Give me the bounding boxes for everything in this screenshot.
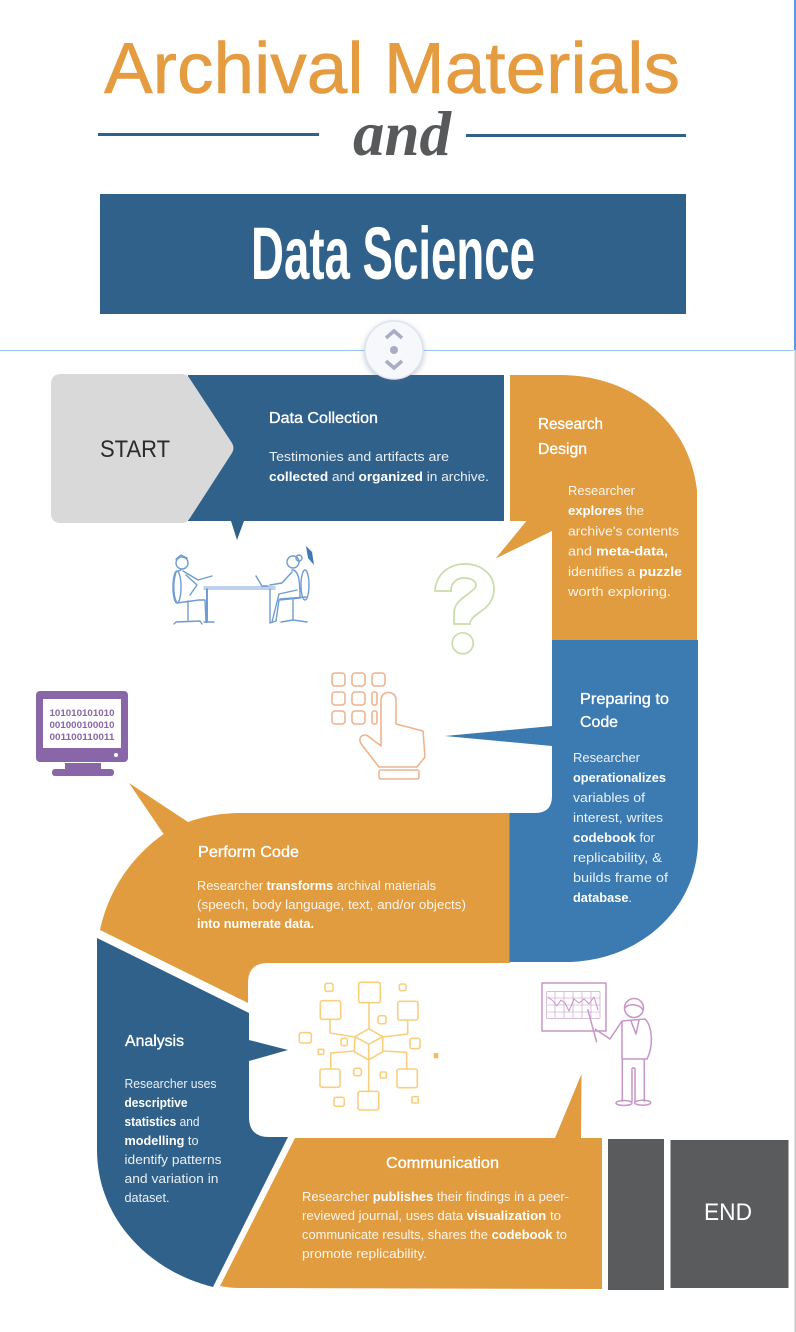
text: analysis body: Researcher uses (124, 1077, 216, 1091)
icon: computer monitor with binary: 001000100010 (50, 720, 114, 731)
text: research design body: explores the (568, 504, 644, 518)
text: preparing to code body: operationalizes (573, 771, 666, 785)
title banner: Data Science (100, 194, 686, 314)
text: perform code body: Researcher transforms archival materials (197, 879, 436, 893)
icon: presenter with chart (542, 983, 651, 1106)
panel: preparing to code (445, 640, 698, 962)
text: analysis body: dataset. (124, 1191, 170, 1205)
text: communication body: reviewed journal, uses data visualization to (302, 1209, 561, 1223)
text: data collection body (269, 450, 489, 484)
heading: preparing to code: Code (580, 714, 618, 731)
icon: question mark (435, 564, 494, 654)
text: preparing to code body: replicability, & (573, 851, 663, 865)
text: preparing to code body: Researcher (573, 751, 640, 765)
text: preparing to code body: database. (573, 891, 632, 905)
text: communication body: promote replicability. (302, 1247, 427, 1261)
text: perform code body (197, 879, 466, 931)
text: preparing to code body: builds frame of (573, 871, 669, 885)
end marker: END (704, 1199, 752, 1226)
panel: perform code (100, 783, 510, 1003)
text: research design body: and meta-data, (568, 544, 668, 558)
text: communication body (302, 1190, 569, 1261)
text: analysis body: and variation in (124, 1172, 219, 1186)
text: analysis body: modelling to (124, 1134, 199, 1148)
text: preparing to code body: codebook for (573, 831, 655, 845)
panel: data collection (188, 375, 504, 540)
icon: computer monitor with binary: 101010101010 (50, 708, 114, 719)
text: research design body: archive's contents (568, 524, 679, 538)
heading: analysis: Analysis (125, 1033, 184, 1050)
text: data collection body: Testimonies and artifacts are (269, 450, 449, 464)
end marker (608, 1139, 788, 1290)
icon: two people at a table (173, 546, 314, 624)
title: Archival Materials: Archival Materials (104, 29, 680, 109)
heading: communication: Communication (386, 1155, 499, 1172)
heading: preparing to code (580, 691, 669, 731)
text: communication body: Researcher publishes their findings in a peer- (302, 1190, 569, 1204)
start marker: START (100, 436, 170, 463)
text: research design body: identifies a puzzle (568, 565, 682, 579)
text: preparing to code body: variables of (573, 791, 646, 805)
text: research design body: worth exploring. (567, 585, 671, 599)
heading: perform code: Perform Code (198, 844, 299, 861)
text: perform code body: (speech, body language, text, and/or objects) (197, 898, 466, 912)
text: data collection body: collected and organized in archive. (269, 470, 489, 484)
text: analysis body: statistics and (124, 1115, 200, 1129)
icon: data network cube (299, 982, 438, 1110)
text: analysis body: descriptive (124, 1096, 188, 1110)
text: analysis body (124, 1077, 222, 1205)
text: research design body (567, 484, 682, 599)
scroll handle (365, 321, 423, 379)
text: analysis body: identify patterns (124, 1153, 222, 1167)
panel: communication (220, 1074, 602, 1289)
subtitle rule and script word: and (98, 98, 686, 169)
text: preparing to code body: interest, writes (573, 811, 663, 825)
text: preparing to code body (573, 751, 669, 905)
text: research design body: Researcher (568, 484, 635, 498)
icon: computer monitor with binary (36, 691, 128, 776)
heading: research design: Research (538, 416, 603, 433)
icon: computer monitor with binary: 001100110011 (50, 732, 115, 743)
title banner: Data Science: Data Science (251, 212, 535, 295)
start marker (51, 374, 234, 523)
text: communication body: communicate results, shares the codebook to (302, 1228, 567, 1242)
subtitle rule and script word: and: and (353, 98, 452, 169)
heading: preparing to code: Preparing to (580, 691, 669, 708)
heading: data collection: Data Collection (269, 410, 378, 427)
heading: research design: Design (538, 441, 587, 458)
heading: research design (538, 416, 603, 458)
panel: analysis (97, 938, 288, 1287)
text: perform code body: into numerate data. (197, 917, 314, 931)
icon: hand on keypad (332, 673, 425, 779)
panel: research design (496, 375, 697, 640)
